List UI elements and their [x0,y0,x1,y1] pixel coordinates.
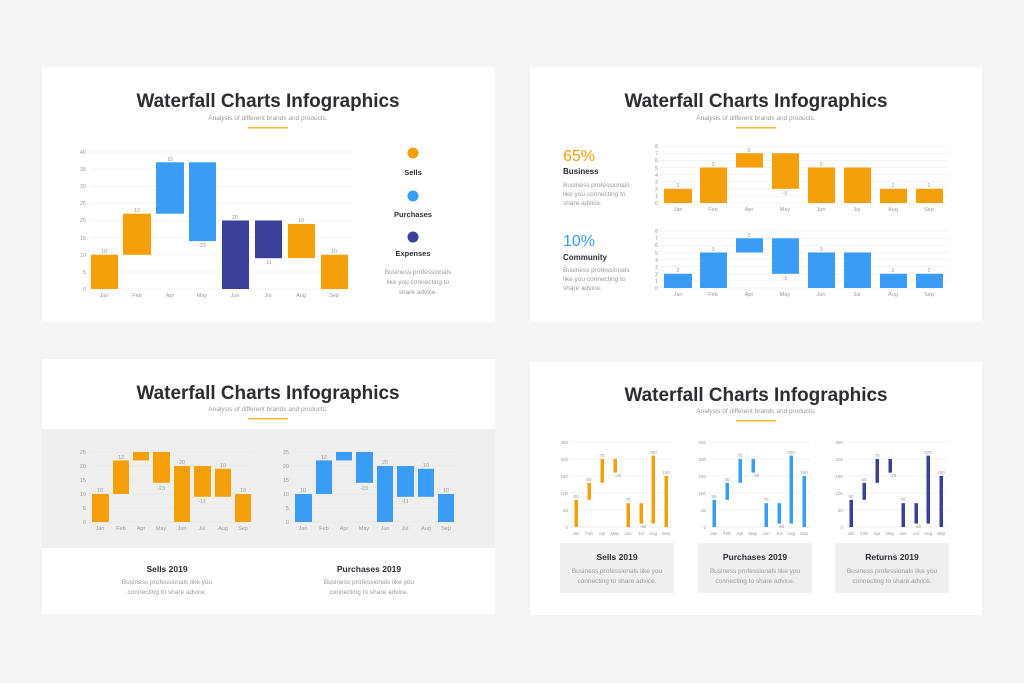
bar chart: sells 2019: Apr [137,526,145,532]
bar chart: sells thin: 200 [560,457,568,462]
text block: sells 2019: Sells 2019 [146,564,188,574]
bar chart: business: 2 [747,148,751,154]
bar chart: purchases 2019: 10 [423,463,429,469]
stat: business 65%: Business professionals [563,182,630,189]
bar chart: community: 1 [655,279,658,285]
bar chart: sells 2019: Sep [238,526,248,532]
text block: purchases 2019 [324,564,415,596]
bar chart: purchases thin: 50 [701,508,706,513]
text block: sells 2019: connecting to share advice. [127,589,207,596]
bar chart: community: -5 [783,276,787,282]
bar chart: sells purchases expenses: Jun [231,293,239,299]
bar chart: returns thin: -40 [890,473,897,478]
bar chart: sells 2019: May [156,526,166,532]
bar chart: community: 2 [676,268,680,274]
bar chart: purchases thin: 150 [698,474,706,479]
bar chart: business: Jan [674,207,682,213]
panel: bottom-right thin bar slide [530,362,982,615]
bar chart: purchases 2019: Aug [421,526,431,532]
text block: purchases 2019: Purchases 2019 [337,564,401,574]
bar chart: returns thin: May [886,531,895,536]
bar chart: purchases thin: 250 [698,440,706,445]
text box: sells 2019: Business professionals like you [572,568,663,575]
bar chart: returns thin: 200 [835,457,843,462]
bar chart: purchases thin [698,440,810,536]
subtitle: Analysis of different brands and products. [208,406,328,413]
bar chart: sells purchases expenses: 40 [80,150,86,156]
bar chart: business: 8 [655,144,658,150]
bar chart: purchases 2019: 0 [286,520,289,526]
bar chart: purchases thin: Jan [710,531,718,536]
bar chart: sells thin: Jan [572,531,580,536]
bar chart: business: Sep [924,207,934,213]
bar chart: purchases 2019 [283,450,456,532]
bar chart: business: 3 [819,162,823,168]
bar chart: sells thin [560,440,672,536]
bar chart: purchases 2019: 5 [286,506,289,512]
bar chart: sells 2019: 0 [83,520,86,526]
bar chart: purchases 2019: 20 [283,464,289,470]
bar chart: business: 4 [655,173,658,179]
bar chart: purchases thin: 200 [698,457,706,462]
bar chart: purchases thin: Feb [723,531,731,536]
bar chart: community: Jan [674,292,682,298]
bar chart: returns thin: Jul [913,531,919,536]
bar chart: sells purchases expenses: Jul [264,293,272,299]
bar chart: sells thin: Feb [585,531,593,536]
stat: community 10%: Business professionals [563,267,630,274]
bar chart: community: Aug [888,292,898,298]
bar chart: sells 2019: 10 [80,492,86,498]
stat: business 65%: 65% [563,148,595,165]
stat: business 65%: Business [563,167,599,176]
bar chart: purchases 2019: Jul [401,526,409,532]
bar chart: business: -5 [783,191,787,197]
bar chart: returns thin: 50 [861,477,867,482]
stat: community 10%: Community [563,253,608,262]
bar chart: purchases thin: 100 [698,491,706,496]
bar chart: purchases 2019: -11 [401,499,409,505]
bar chart: business: Aug [888,207,898,213]
bar chart: community: 3 [655,265,658,271]
bar chart: community: 4 [655,258,658,264]
subtitle: Analysis of different brands and products. [208,115,328,122]
bar chart: community: 8 [655,229,658,235]
bar chart: returns thin: Aug [924,531,932,536]
stat: business 65%: like you connecting to [563,191,626,198]
bar chart: community: 5 [655,251,658,257]
bar chart: purchases 2019: 10 [300,488,306,494]
bar chart: returns thin: 70 [900,497,906,502]
bar chart: returns thin: -60 [915,524,922,529]
bar chart: purchases thin: 50 [724,477,730,482]
bar chart: sells purchases expenses: 30 [80,184,86,190]
bar chart: returns thin: 0 [840,525,843,530]
text block: sells 2019: Business professionals like you [122,579,213,586]
stat: community 10%: 10% [563,233,595,250]
bar chart: purchases 2019: Sep [441,526,451,532]
text block: purchases 2019: connecting to share advice. [329,589,409,596]
bar chart: community: 3 [711,247,715,253]
bar chart: sells purchases expenses: 35 [80,167,86,173]
text block: sells 2019 [122,564,213,596]
bar chart: community: 2 [927,268,931,274]
bar chart: sells purchases expenses: 20 [80,218,86,224]
text box: purchases 2019: Business professionals like you [710,568,801,575]
bar chart: business: 6 [655,158,658,164]
bar chart: purchases thin: 200 [787,450,795,455]
title: Waterfall Charts Infographics [624,385,888,406]
bar chart: sells thin: 250 [560,440,568,445]
subtitle: Analysis of different brands and products. [696,408,816,415]
bar chart: returns thin: 70 [874,453,880,458]
stat: community 10%: share advice. [563,285,602,292]
bar chart: sells 2019: Jul [198,526,206,532]
text box: returns 2019: Business professionals like you [847,568,938,575]
legend: Expenses [395,249,431,258]
bar chart: sells 2019: 25 [80,450,86,456]
bar chart: community: 2 [655,272,658,278]
bar chart: sells purchases expenses: 10 [80,253,86,259]
bar chart: sells purchases expenses: Apr [166,293,174,299]
bar chart: business: 2 [655,187,658,193]
bar chart: sells 2019: 20 [179,460,185,466]
bar chart: sells 2019: Jan [96,526,104,532]
bar chart: sells thin: 70 [625,497,631,502]
bar chart: sells 2019 [80,450,253,532]
bar chart: sells 2019: Feb [116,526,126,532]
text box: returns 2019: Returns 2019 [865,552,919,562]
bar chart: sells purchases expenses: 0 [83,287,86,293]
text box: purchases 2019: Purchases 2019 [723,552,787,562]
bar chart: sells 2019: -23 [157,486,165,492]
legend: Sells [404,168,422,177]
text box: returns 2019: connecting to share advice. [852,578,932,585]
bar chart: returns thin: 200 [924,450,932,455]
bar chart: community: May [780,292,790,298]
bar chart: community: 7 [655,236,658,242]
panel: top-right business community slide [530,67,982,322]
bar chart: sells thin: Sep [662,531,670,536]
bar chart: community: 2 [891,268,895,274]
bar chart: purchases 2019: 12 [321,455,327,461]
bar chart: sells purchases expenses: Feb [132,293,142,299]
text box: purchases 2019: connecting to share advice. [715,578,795,585]
bar chart: purchases thin: Jul [776,531,782,536]
bar chart: purchases thin: 150 [800,470,808,475]
bar chart: community: Feb [708,292,718,298]
bar chart: community: Sep [924,292,934,298]
bar chart: sells thin: 100 [560,491,568,496]
bar chart: returns thin: Sep [937,531,945,536]
bar chart: sells 2019: Aug [218,526,228,532]
bar chart: sells purchases expenses: 10 [298,218,304,224]
bar chart: business: 0 [655,201,658,207]
bar chart: business: May [780,207,790,213]
text box: purchases 2019 [698,543,812,593]
bar chart: sells thin: 80 [573,494,579,499]
text box: sells 2019: Sells 2019 [596,552,638,562]
bar chart: purchases thin: Aug [787,531,795,536]
bar chart: business: 3 [655,180,658,186]
bar chart: sells purchases expenses: May [197,293,207,299]
bar chart: sells thin: 0 [565,525,568,530]
bar chart: returns thin: Feb [860,531,868,536]
legend: Business professionals [385,269,452,276]
bar chart: community: 6 [655,243,658,249]
bar chart: sells thin: 50 [586,477,592,482]
stat: business 65% [563,148,630,207]
bar chart: community: Jun [817,292,825,298]
bar chart: purchases 2019: 15 [283,478,289,484]
bar chart: purchases 2019: Jan [299,526,307,532]
bar chart: sells purchases expenses: 25 [80,201,86,207]
bar chart: sells thin: -60 [640,524,647,529]
bar chart: business: Apr [745,207,753,213]
bar chart: returns thin: 80 [848,494,854,499]
bar chart: community: Apr [745,292,753,298]
bar chart: community: 3 [819,247,823,253]
bar chart: sells 2019: 20 [80,464,86,470]
bar chart: purchases 2019: 20 [382,460,388,466]
title: Waterfall Charts Infographics [136,383,400,404]
legend: like you connecting to [387,279,450,286]
text box: returns 2019 [835,543,949,593]
bar chart: purchases 2019: -23 [360,486,368,492]
bar chart: purchases thin: -40 [753,473,760,478]
bar chart: sells 2019: -11 [198,499,206,505]
bar chart: sells purchases expenses: 10 [331,249,337,255]
bar chart: sells purchases expenses: 15 [167,157,173,163]
bar chart: returns thin: Apr [873,531,881,536]
bar chart: returns thin: Jun [899,531,907,536]
subtitle: Analysis of different brands and products. [696,115,816,122]
bar chart: purchases 2019: Apr [340,526,348,532]
bar chart: returns thin: 250 [835,440,843,445]
bar chart: returns thin: Jan [847,531,855,536]
bar chart: sells 2019: 10 [97,488,103,494]
bar chart: business: 2 [891,183,895,189]
panel: bottom-left sells purchases slide [42,359,495,614]
bar chart: community: 2 [747,233,751,239]
bar chart: purchases thin: 80 [711,494,717,499]
bar chart: business: 7 [655,151,658,157]
bar chart: purchases 2019: Jun [381,526,389,532]
bar chart: sells thin: -40 [615,473,622,478]
text box: sells 2019: connecting to share advice. [577,578,657,585]
legend [385,148,452,296]
bar chart: sells 2019: 5 [83,506,86,512]
bar chart: sells purchases expenses: 15 [80,236,86,242]
bar chart: business: 1 [655,194,658,200]
bar chart: purchases thin: Apr [736,531,744,536]
bar chart: community [655,229,948,298]
bar chart: sells thin: 70 [599,453,605,458]
bar chart: sells thin: 50 [563,508,568,513]
bar chart: purchases 2019: 25 [283,450,289,456]
bar chart: returns thin: 100 [835,491,843,496]
legend: Purchases [394,210,432,219]
panel: top-left waterfall slide [42,67,495,322]
stat: business 65%: share advice. [563,200,602,207]
bar chart: purchases thin: Sep [800,531,808,536]
bar chart: sells purchases expenses: Aug [296,293,306,299]
title: Waterfall Charts Infographics [624,91,888,112]
bar chart: purchases 2019: Feb [319,526,329,532]
stat: community 10%: like you connecting to [563,276,626,283]
bar chart: purchases thin: 70 [737,453,743,458]
bar chart: sells purchases expenses: -23 [198,243,206,249]
bar chart: returns thin [835,440,947,536]
bar chart: sells thin: Aug [649,531,657,536]
bar chart: returns thin: 50 [838,508,843,513]
bar chart: business: 2 [676,183,680,189]
bar chart: business: Jun [817,207,825,213]
bar chart: community: 0 [655,286,658,292]
bar chart: purchases thin: 70 [763,497,769,502]
bar chart: sells purchases expenses: Jan [100,293,108,299]
bar chart: sells purchases expenses: 10 [101,249,107,255]
bar chart: business: 3 [711,162,715,168]
bar chart: sells 2019: 10 [240,488,246,494]
bar chart: purchases 2019: 10 [443,488,449,494]
bar chart: purchases 2019: 10 [283,492,289,498]
text box: sells 2019 [560,543,674,593]
bar chart: returns thin: 150 [937,470,945,475]
bar chart: purchases thin: Jun [762,531,770,536]
bar chart: business: 5 [655,166,658,172]
bar chart: business: Feb [708,207,718,213]
bar chart: sells thin: Jun [624,531,632,536]
bar chart: sells thin: 150 [662,470,670,475]
legend: share advice. [399,289,438,296]
bar chart: purchases thin: 0 [703,525,706,530]
bar chart: sells purchases expenses: -11 [264,260,272,266]
bar chart: returns thin: 150 [835,474,843,479]
bar chart: sells purchases expenses [80,150,352,299]
bar chart: sells thin: Apr [598,531,606,536]
bar chart: sells purchases expenses: 12 [134,208,140,214]
bar chart: sells 2019: 10 [220,463,226,469]
bar chart: sells purchases expenses: 20 [232,215,238,221]
bar chart: business: 2 [927,183,931,189]
bar chart: sells thin: 150 [560,474,568,479]
title: Waterfall Charts Infographics [136,91,400,112]
stat: community 10% [563,233,630,292]
bar chart: purchases thin: -60 [778,524,785,529]
bar chart: sells purchases expenses: Sep [329,293,339,299]
bar chart: purchases thin: May [749,531,758,536]
bar chart: community: Jul [853,292,861,298]
bar chart: sells purchases expenses: 5 [83,270,86,276]
bar chart: sells 2019: 15 [80,478,86,484]
bar chart: sells thin: 200 [649,450,657,455]
bar chart: business [655,144,948,213]
text block: purchases 2019: Business professionals like you [324,579,415,586]
bar chart: sells thin: May [611,531,620,536]
bar chart: purchases 2019: May [359,526,369,532]
bar chart: sells thin: Jul [638,531,644,536]
bar chart: sells 2019: 12 [118,455,124,461]
bar chart: sells 2019: Jun [178,526,186,532]
bar chart: business: Jul [853,207,861,213]
